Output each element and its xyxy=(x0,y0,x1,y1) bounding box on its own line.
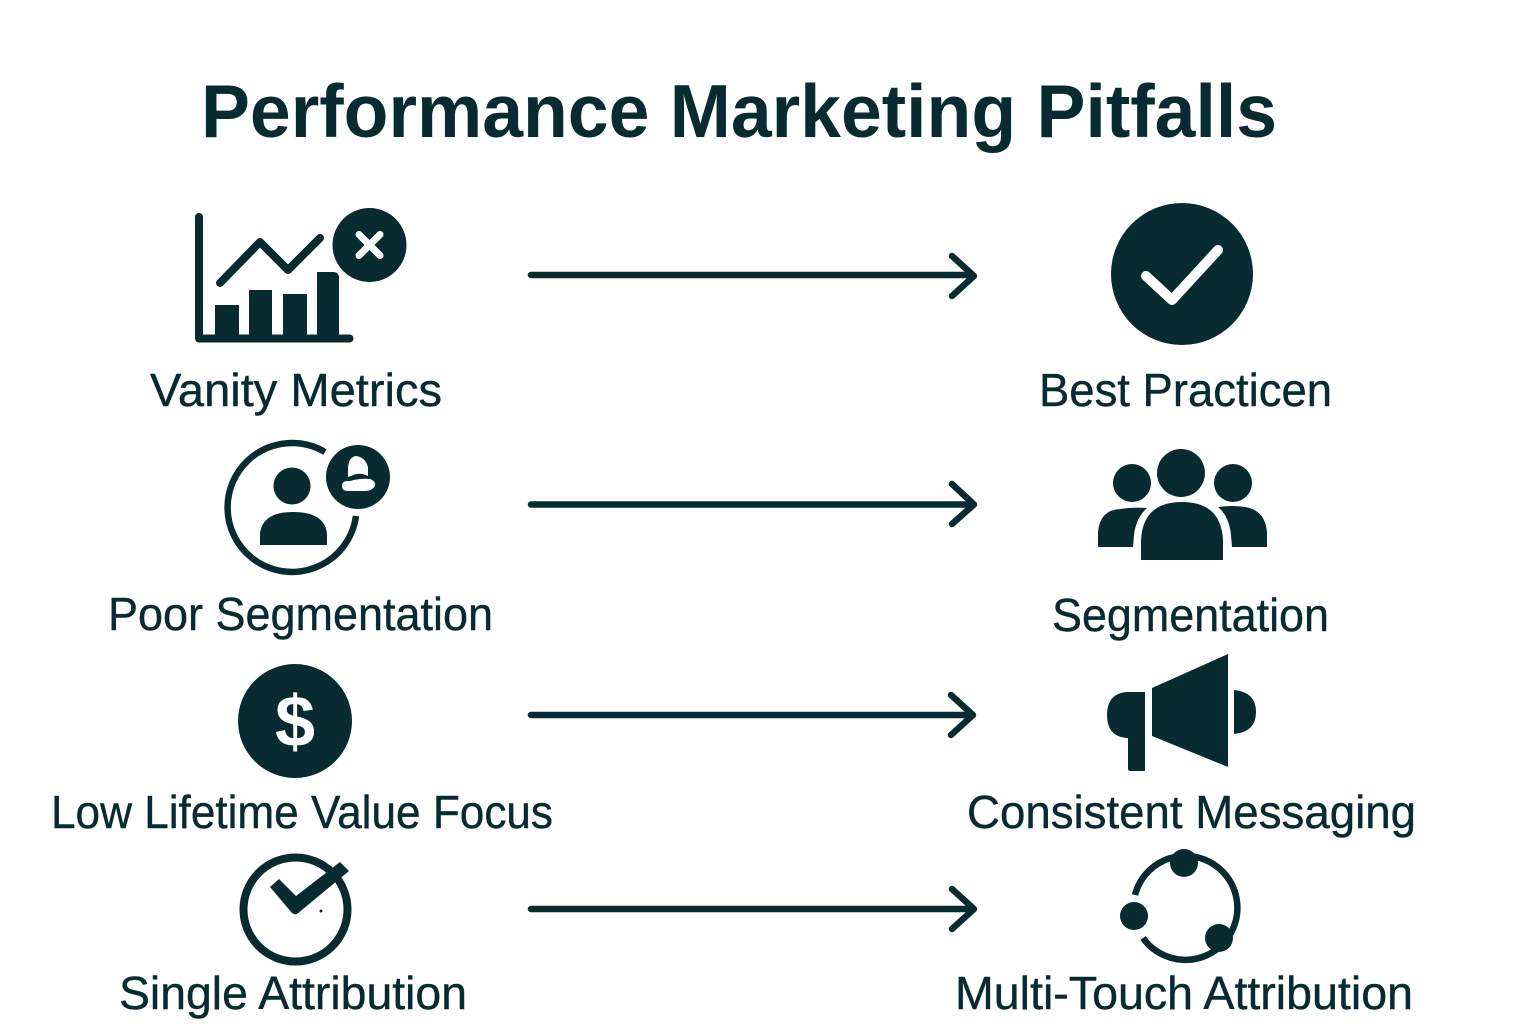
icon: clock with check xyxy=(244,858,349,962)
icon: check circle xyxy=(1111,203,1253,345)
title: Performance Marketing Pitfalls xyxy=(201,69,1277,153)
icon: person in ring with badge xyxy=(228,443,390,572)
arrow: row 3 xyxy=(531,695,973,735)
icon: bar chart with x badge xyxy=(199,208,406,338)
icon: megaphone xyxy=(1107,654,1256,771)
label: Low Lifetime Value Focus: Low Lifetime Value Focus xyxy=(51,786,553,838)
label: Vanity Metrics: Vanity Metrics xyxy=(150,364,442,416)
label: Poor Segmentation: Poor Segmentation xyxy=(108,588,493,640)
label: Multi-Touch Attribution: Multi-Touch Attribution xyxy=(955,967,1413,1019)
icon: dollar coin: $ xyxy=(275,682,315,762)
row 3: low lifetime value to consistent messaging xyxy=(51,654,1416,838)
label: Best Practicen: Best Practicen xyxy=(1039,364,1332,416)
label: Segmentation: Segmentation xyxy=(1052,589,1329,641)
arrow: row 2 xyxy=(531,484,974,524)
icon: group of people xyxy=(1098,449,1267,560)
icon: dollar coin xyxy=(238,664,352,778)
row 4: single attribution to multi-touch attribution xyxy=(119,849,1413,1019)
row 1: vanity metrics to best practice xyxy=(150,203,1332,416)
label: Consistent Messaging: Consistent Messaging xyxy=(967,786,1416,838)
icon: connected circle nodes xyxy=(1120,849,1237,960)
arrow: row 1 xyxy=(531,256,974,296)
row 2: poor segmentation to segmentation xyxy=(108,443,1329,641)
arrow: row 4 xyxy=(531,889,974,929)
label: Single Attribution: Single Attribution xyxy=(119,967,467,1019)
